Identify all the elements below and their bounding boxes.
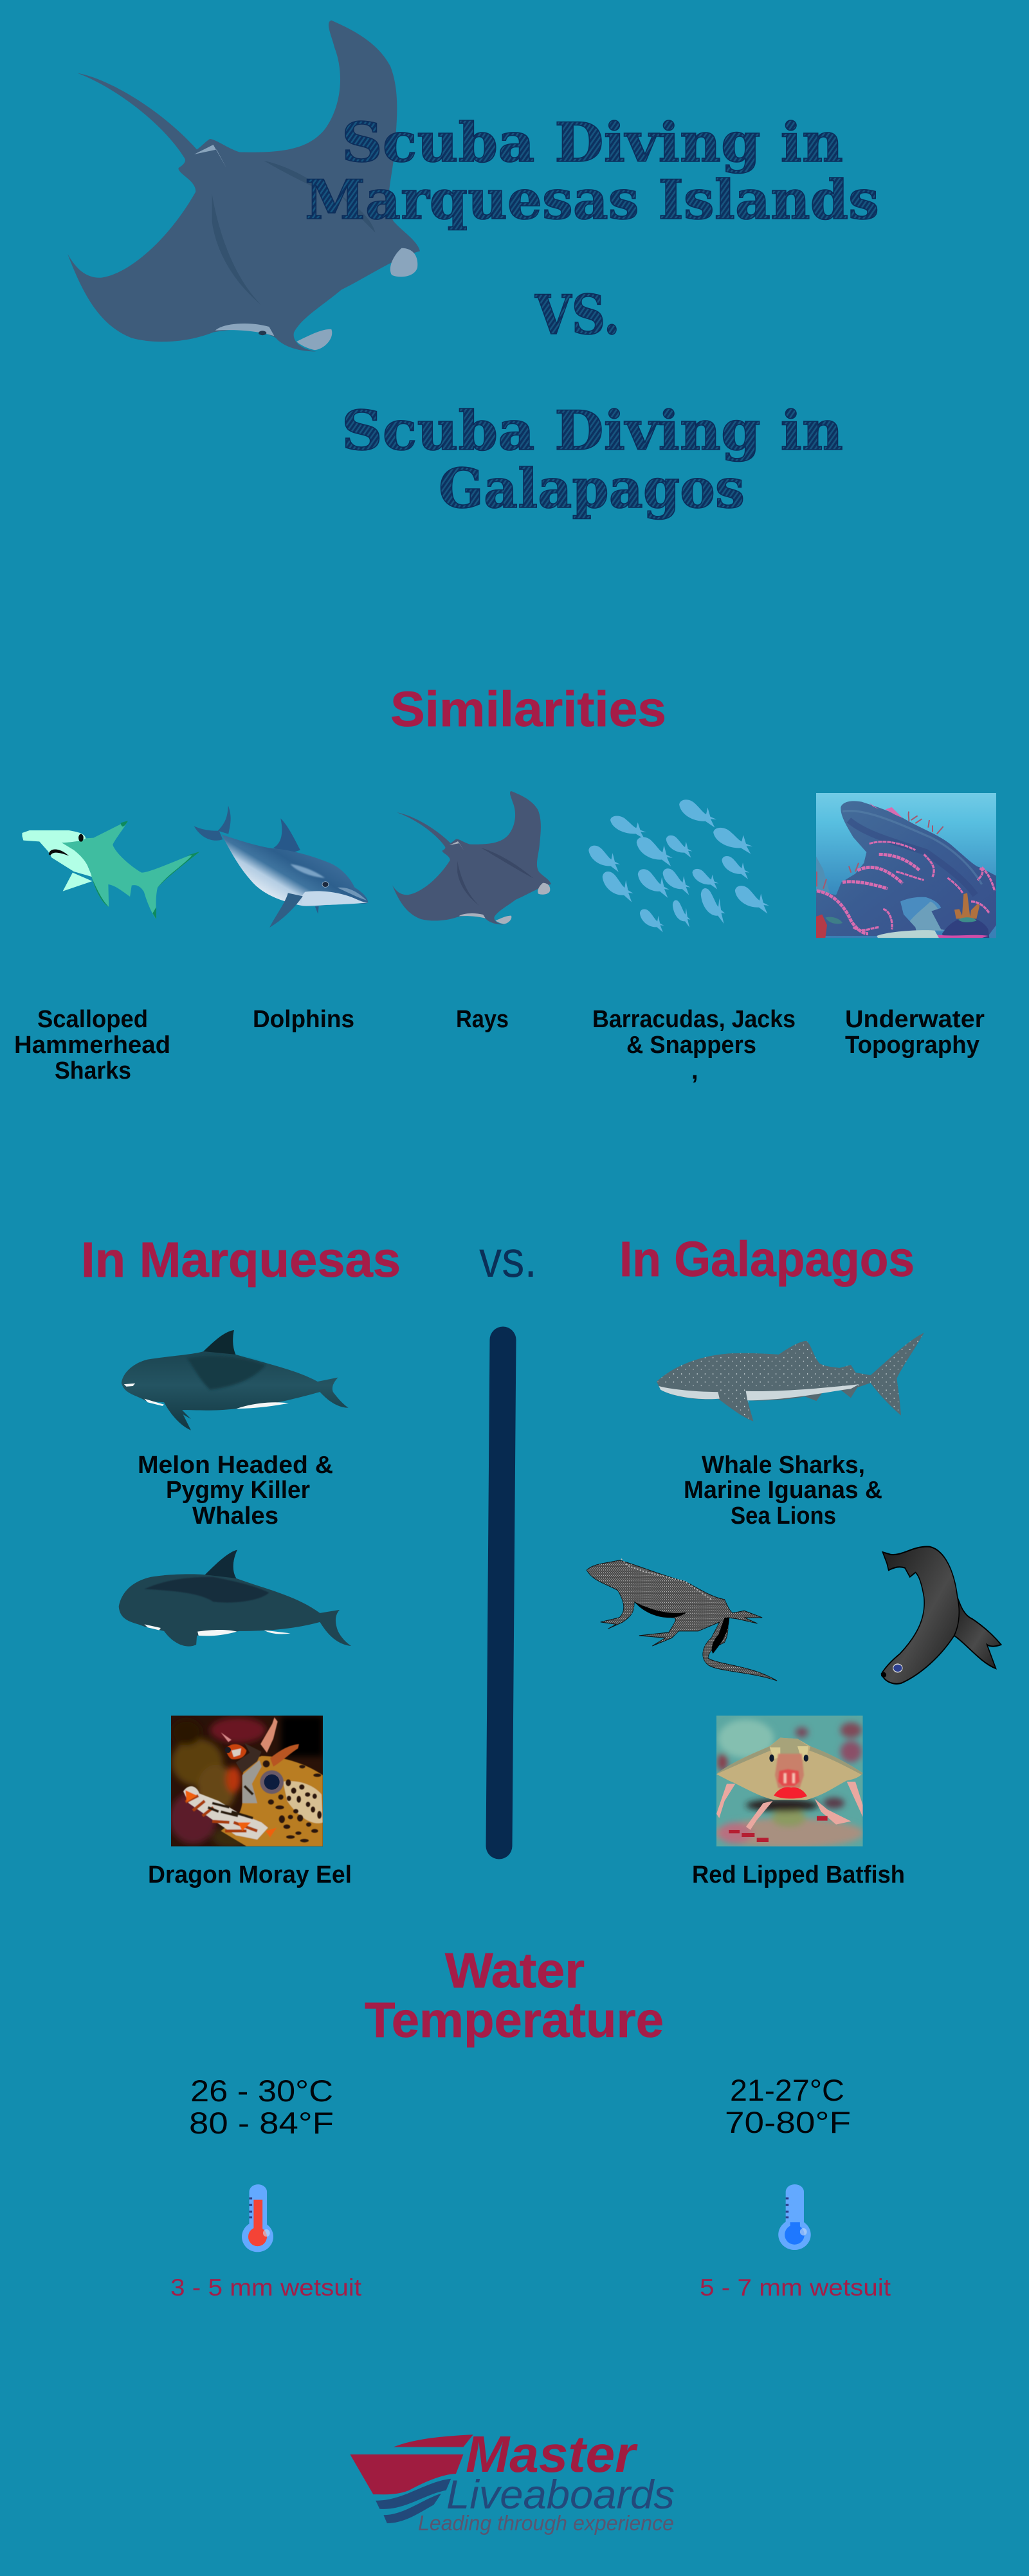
similarity labels: Topography xyxy=(845,1032,979,1059)
logo wordmark xyxy=(418,2425,675,2535)
image: red lipped batfish xyxy=(714,1715,864,1848)
temperature: marquesas: 80 - 84°F xyxy=(189,2106,334,2140)
image: dragon moray eel xyxy=(169,1715,323,1848)
temperature: galapagos xyxy=(725,2073,851,2139)
label: melon headed and pygmy killer whales: Whales xyxy=(192,1503,278,1530)
icon: cool thermometer xyxy=(778,2184,811,2250)
icon: manta ray header illustration xyxy=(68,21,420,351)
icon: whale shark xyxy=(657,1333,924,1421)
divider bar xyxy=(499,1340,503,1846)
heading: water temperature: Temperature xyxy=(365,1993,664,2048)
label: whale sharks, marine iguanas and sea lions: Sea Lions xyxy=(731,1503,836,1530)
label: whale sharks, marine iguanas and sea lions: Marine Iguanas & xyxy=(684,1477,882,1504)
icon: ray xyxy=(392,791,551,924)
heading: water temperature: Water xyxy=(445,1943,585,1998)
similarity labels: Dolphins xyxy=(253,1006,354,1033)
label: melon headed and pygmy killer whales: Pygmy Killer xyxy=(166,1477,310,1504)
label: melon headed and pygmy killer whales xyxy=(138,1452,333,1530)
logo mark: hull and waves xyxy=(350,2434,473,2523)
similarity labels: Hammerhead xyxy=(14,1032,170,1059)
temperature: marquesas: 26 - 30°C xyxy=(190,2074,333,2108)
heading: in marquesas: In Marquesas xyxy=(81,1232,401,1288)
icon: warm thermometer xyxy=(242,2184,273,2252)
temperature: galapagos: 21-27°C xyxy=(730,2073,844,2107)
heading: water temperature xyxy=(365,1943,664,2048)
icon: marine iguana xyxy=(587,1559,777,1681)
title: Marquesas Islands xyxy=(305,168,879,232)
heading: in galapagos: In Galapagos xyxy=(619,1232,915,1287)
icon: hammerhead shark xyxy=(22,821,200,919)
label: whale sharks, marine iguanas and sea lions: Whale Sharks, xyxy=(702,1452,865,1479)
title: VS. xyxy=(534,283,620,347)
logo: master liveaboards xyxy=(350,2425,675,2535)
similarity labels: Underwater xyxy=(845,1006,985,1033)
title: Scuba Diving in xyxy=(341,111,843,174)
icon: school of fish xyxy=(588,799,769,933)
similarity labels: Scalloped xyxy=(37,1006,148,1033)
heading: similarities: Similarities xyxy=(390,682,666,737)
label: melon headed and pygmy killer whales: Melon Headed & xyxy=(138,1452,333,1479)
similarity labels: Rays xyxy=(456,1006,509,1033)
similarity labels: , xyxy=(691,1057,698,1084)
label: wetsuit marquesas: 3 - 5 mm wetsuit xyxy=(170,2274,362,2301)
similarity labels xyxy=(14,1006,985,1084)
label: red lipped batfish: Red Lipped Batfish xyxy=(692,1861,905,1888)
image: underwater topography xyxy=(816,793,996,938)
title xyxy=(305,111,879,520)
icon: sea lion xyxy=(881,1547,1001,1684)
similarity labels: Barracudas, Jacks xyxy=(592,1006,796,1033)
label: whale sharks, marine iguanas and sea lions xyxy=(684,1452,882,1530)
label: dragon moray eel: Dragon Moray Eel xyxy=(148,1861,352,1888)
logo wordmark: Master xyxy=(466,2425,638,2483)
heading: vs.: vs. xyxy=(479,1230,537,1288)
title: Galapagos xyxy=(439,457,745,520)
temperature: galapagos: 70-80°F xyxy=(725,2105,851,2139)
logo wordmark: Leading through experience xyxy=(418,2511,674,2535)
logo wordmark: Liveaboards xyxy=(446,2472,675,2517)
icon: melon headed whale xyxy=(122,1330,349,1430)
icon: pygmy killer whale xyxy=(119,1550,351,1647)
similarity labels: Sharks xyxy=(55,1057,131,1084)
similarity labels: & Snappers xyxy=(626,1032,756,1059)
temperature: marquesas xyxy=(189,2074,334,2140)
label: wetsuit galapagos: 5 - 7 mm wetsuit xyxy=(700,2274,891,2301)
icon: dolphin xyxy=(194,805,368,927)
title: Scuba Diving in xyxy=(341,399,843,462)
